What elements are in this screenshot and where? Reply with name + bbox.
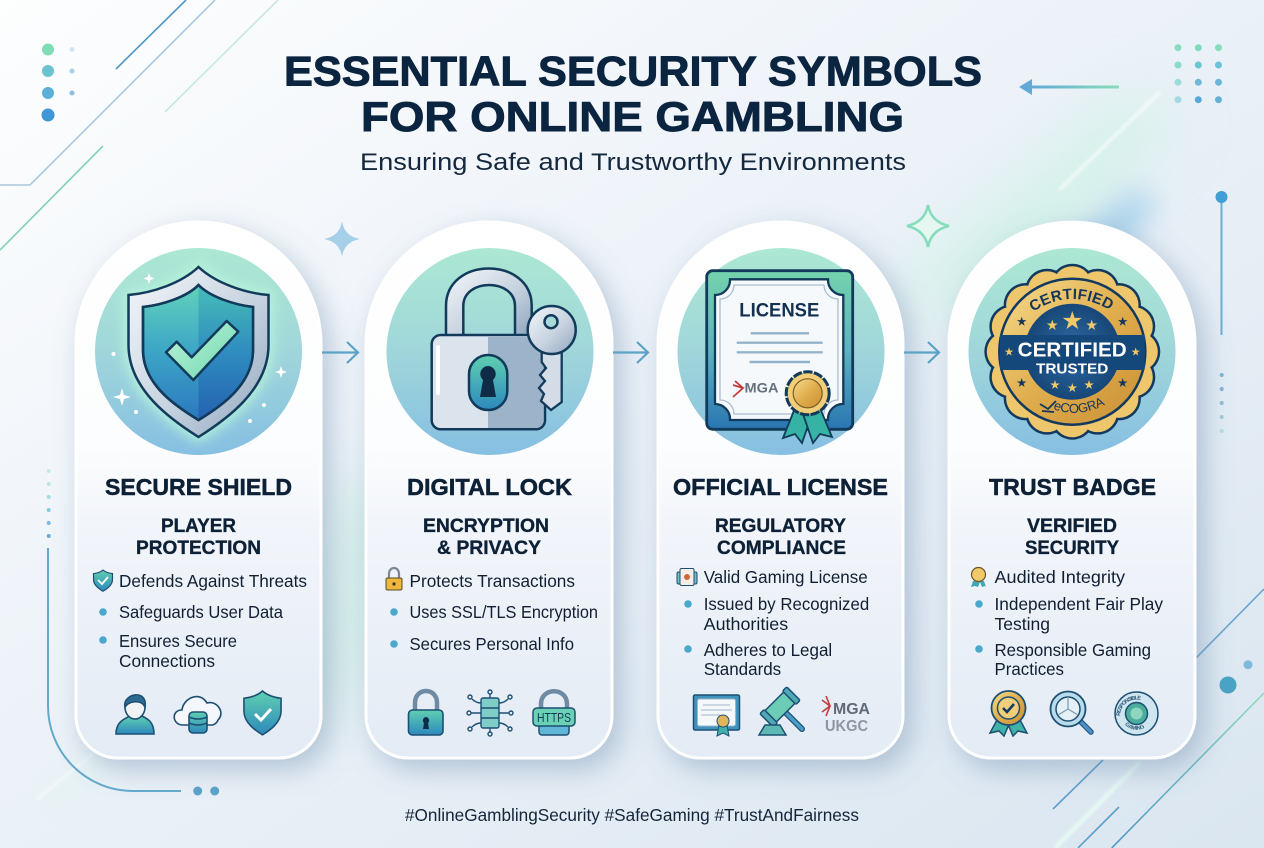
heading: official license: OFFICIAL LICENSE [673, 474, 888, 500]
list: encryption and privacy: Protects Transactions [410, 571, 575, 591]
list: regulatory compliance: Standards [704, 659, 781, 679]
heading: digital lock: DIGITAL LOCK [407, 474, 572, 500]
subheading: regulatory compliance [715, 515, 846, 559]
list: verified security: Practices [994, 659, 1064, 679]
subheading: verified security: SECURITY [1025, 537, 1119, 559]
icon: regulator logos [822, 696, 870, 735]
list: verified security: Independent Fair Play [994, 594, 1163, 614]
icon: cloud database [174, 697, 221, 733]
subtitle: Ensuring Safe and Trustworthy Environments [360, 149, 906, 176]
list: verified security: Responsible Gaming [994, 640, 1151, 660]
decoration: top-right arrow [1019, 79, 1119, 95]
title: ESSENTIAL SECURITY SYMBOLS [284, 48, 982, 94]
list: player protection: Ensures Secure [119, 631, 237, 651]
icon: small medal [971, 568, 986, 587]
heading: secure shield: SECURE SHIELD [105, 474, 292, 500]
subheading: verified security [1025, 515, 1119, 559]
list: verified security: Audited Integrity [994, 567, 1125, 587]
icon: green sparkle [907, 205, 949, 247]
list: player protection [99, 571, 307, 671]
list: encryption and privacy: Uses SSL/TLS Encryption [410, 602, 598, 622]
title [284, 48, 982, 140]
icon: small license [677, 568, 697, 586]
arrow: license to badge [904, 342, 939, 363]
list: verified security [975, 567, 1163, 679]
icon: responsible gaming seal: GAMING [1126, 722, 1144, 730]
title: FOR ONLINE GAMBLING [361, 93, 904, 140]
icon: certified seal [968, 248, 1176, 455]
subheading: regulatory compliance: REGULATORY [715, 515, 846, 537]
icon: certificate [694, 695, 740, 736]
icon: shield in circle [95, 248, 302, 455]
panel: official license [658, 222, 903, 758]
subheading: regulatory compliance: COMPLIANCE [717, 537, 846, 559]
icon: magnifier [1050, 692, 1091, 732]
icon: license certificate: MGA [744, 380, 778, 396]
decoration: top-right dot grid [1174, 44, 1222, 103]
icon: check shield [244, 691, 281, 735]
icon: user [116, 695, 154, 734]
icon: certified seal: eCOGRA [1054, 398, 1105, 413]
decoration: bottom-right lines and dots [1053, 589, 1264, 848]
hashtags: #OnlineGamblingSecurity #SafeGaming #TrustAndFairness [405, 805, 859, 825]
subheading: player protection: PLAYER [161, 515, 236, 537]
list: regulatory compliance: Valid Gaming License [704, 567, 868, 587]
list: player protection: Safeguards User Data [119, 602, 283, 622]
icon: medal [990, 691, 1027, 736]
icon: responsible gaming seal [1114, 691, 1159, 736]
list: regulatory compliance: Issued by Recognized [704, 594, 869, 614]
icon: license certificate: LICENSE [739, 300, 819, 322]
icon: certified seal: CERTIFIED [1030, 288, 1113, 310]
icon: https lock: HTTPS [537, 710, 571, 725]
subheading: player protection [136, 515, 261, 559]
icon: gavel [759, 687, 802, 735]
icon: regulator logos: MGA [833, 701, 870, 718]
panel: digital lock [366, 222, 612, 758]
icon: small shield bullet [94, 570, 112, 591]
subheading: encryption and privacy: & PRIVACY [437, 537, 541, 559]
arrow: shield to lock [322, 342, 358, 363]
list: verified security: Testing [994, 614, 1050, 634]
panel: trust badge [942, 218, 1218, 784]
icon: small gold lock [386, 568, 402, 590]
list: regulatory compliance [684, 567, 869, 679]
icon: padlock and key [386, 248, 594, 455]
list: regulatory compliance: Adheres to Legal [704, 640, 832, 660]
list: player protection: Defends Against Threats [119, 571, 307, 591]
icon: regulator logos: UKGC [825, 718, 868, 735]
decoration: bottom-left connector [47, 469, 219, 796]
icon: blue sparkle [324, 221, 360, 257]
icon: lock [408, 691, 443, 735]
subheading: player protection: PROTECTION [136, 537, 261, 559]
arrow: lock to license [613, 342, 648, 363]
subheading: encryption and privacy [423, 515, 549, 559]
icon: certified seal: CERTIFIED [1018, 340, 1127, 362]
subheading: encryption and privacy: ENCRYPTION [423, 515, 549, 537]
panel: secure shield [76, 222, 321, 758]
decoration: top-left lines and dots [0, 0, 278, 250]
icon: server network [467, 690, 513, 736]
list: encryption and privacy: Secures Personal Info [410, 634, 574, 654]
icon: certified seal: TRUSTED [1036, 360, 1108, 377]
list: encryption and privacy [390, 571, 598, 654]
list: regulatory compliance: Authorities [704, 614, 788, 634]
list: player protection: Connections [119, 651, 215, 671]
icon: license certificate [678, 248, 884, 455]
icon: responsible gaming seal: RESPONSIBLE [1116, 696, 1141, 716]
icon: https lock [533, 691, 575, 735]
decoration: right vertical line and dots [1216, 191, 1228, 433]
heading: trust badge: TRUST BADGE [989, 474, 1156, 500]
subheading: verified security: VERIFIED [1027, 515, 1117, 537]
